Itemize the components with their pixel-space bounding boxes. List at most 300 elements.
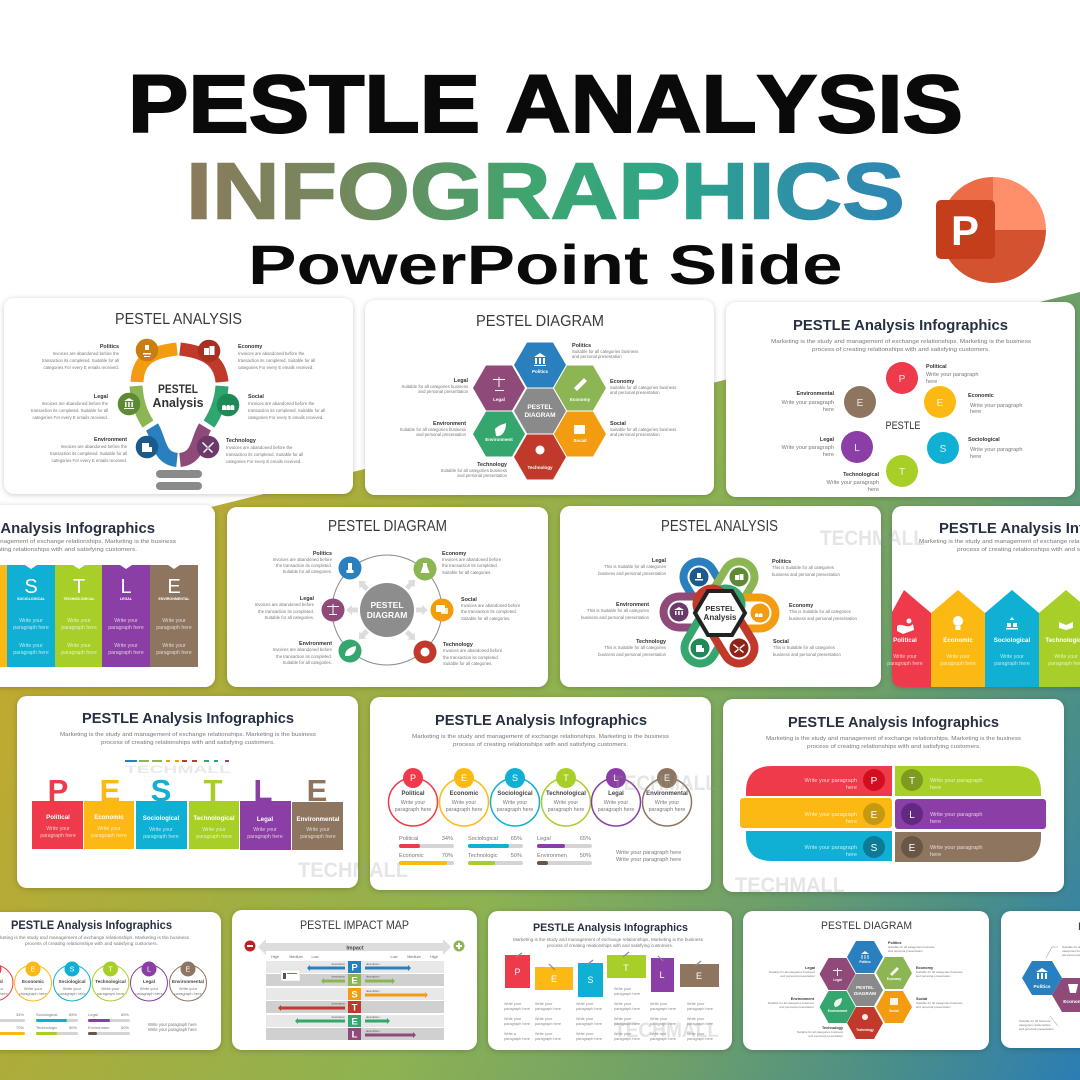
note paragraphs: Write your <box>576 1032 594 1036</box>
letter circles <box>841 362 959 487</box>
label: Economy: categories For every E emails received. <box>238 365 313 370</box>
panel: PESTLE letter blocks slide <box>17 696 358 888</box>
arrow columns: paragraph here <box>940 661 976 667</box>
note paragraphs: Write your <box>504 1002 522 1006</box>
impact grid: S <box>351 990 358 1000</box>
label: Economy: Economy <box>238 344 262 350</box>
sticky notes: P <box>514 967 521 977</box>
ring items: Write your <box>140 986 159 991</box>
arrow columns: Political <box>893 637 917 644</box>
connector notes <box>1019 945 1080 1031</box>
label: Environment <box>768 997 815 1009</box>
slide heading: PESTEL ANALYSIS <box>661 518 778 535</box>
arrow columns: paragraph here <box>887 661 923 667</box>
column chart panels: E <box>167 576 181 598</box>
label: Technological <box>827 472 879 493</box>
impact grid <box>266 961 444 1040</box>
column chart panels: S <box>24 576 38 598</box>
impact arrows: description <box>331 1002 345 1006</box>
note paragraphs: paragraph here <box>504 1022 530 1026</box>
impact scale labels: Medium <box>289 955 303 959</box>
progress bars: Sociological <box>36 1012 57 1017</box>
slide heading: PESTLE Analysis Infographics <box>788 714 999 731</box>
column chart panels: paragraph here <box>156 625 192 631</box>
hexagon cluster: Politics <box>532 369 548 374</box>
connector notes: Suitable for all business <box>1019 1019 1051 1023</box>
label: Environment: categories For every E emails received. <box>52 458 127 463</box>
letter blocks: T <box>204 773 223 808</box>
hexagon cluster: Technology <box>856 1028 874 1032</box>
ring items: S <box>512 773 518 783</box>
panel: PESTEL impact map slide <box>232 910 477 1050</box>
letter blocks: Write your <box>46 826 70 832</box>
paragraph note: Write your paragraph here <box>148 1022 197 1027</box>
label: Legal: Legal <box>805 966 815 970</box>
hexagon cluster: Politics <box>859 960 871 964</box>
watermark: TECHMALL middle: TECHMALL <box>612 772 717 795</box>
label: Economy <box>916 966 963 978</box>
label: Technology <box>443 642 503 666</box>
note paragraphs: Write your <box>650 1002 668 1006</box>
slide subtitle <box>412 734 669 748</box>
impact scale labels: Low <box>312 955 319 959</box>
ring items: Environmental <box>646 791 688 797</box>
ring items: L <box>147 966 151 974</box>
column chart panels: Write your <box>114 618 138 624</box>
label: Environment <box>273 641 333 665</box>
note paragraphs: paragraph here <box>535 1022 561 1026</box>
watermark: TECHMALL left: TECHMALL <box>298 859 408 882</box>
impact arrows: description <box>331 1015 345 1019</box>
slide heading: PESTEL IMPACT MAP <box>300 918 409 932</box>
arrow columns: paragraph here <box>994 661 1030 667</box>
ring items: paragraph here <box>446 807 482 813</box>
note paragraphs: paragraph here <box>687 1022 713 1026</box>
label: Economic: Economic <box>968 393 994 399</box>
split bars: here <box>846 852 857 858</box>
panel: circular PESTEL diagram slide <box>227 507 548 687</box>
ring items: Technological <box>95 979 126 984</box>
label: Legal: Legal <box>820 437 834 443</box>
label: Economy: Economy <box>442 551 466 557</box>
split bars: here <box>846 785 857 791</box>
label: Politics: and personal presentation <box>888 949 923 953</box>
label: Politics: the transaction its completed. <box>276 563 332 568</box>
note paragraphs: paragraph here <box>650 1007 676 1011</box>
impact arrows: description <box>366 974 380 978</box>
progress bars: Legal <box>88 1012 98 1017</box>
ring items <box>388 768 692 826</box>
hexagon cluster: Social <box>889 1009 899 1013</box>
note paragraphs: paragraph here <box>535 1007 561 1011</box>
impact grid: L <box>352 1030 358 1040</box>
slide heading: PESTLE Analysis Infographics <box>533 922 688 934</box>
label: Environmental: Environmental <box>797 391 834 397</box>
ring items: Write your <box>452 800 476 806</box>
ring items: P <box>410 773 416 783</box>
slide subtitle: process of creating relationships with and satisfying customers. <box>25 941 158 946</box>
progress bars: Environmen <box>537 853 567 859</box>
progress bars: 50% <box>580 853 591 859</box>
label: Environment: Invoices are abandoned before <box>273 647 333 652</box>
label: Politics: Invoices are abandoned before the <box>53 351 120 356</box>
arrow columns: Write your <box>946 654 970 660</box>
progress bars: Political <box>399 836 418 842</box>
progress bars: Environmen <box>88 1025 109 1030</box>
ring items: E <box>31 966 36 974</box>
label: Social <box>248 394 325 420</box>
label: Technology: Invoices are abandoned before <box>443 648 503 653</box>
column chart panels: paragraph here <box>61 625 97 631</box>
ring items: paragraph here <box>174 991 202 996</box>
hexagon cluster <box>820 941 912 1039</box>
label: Politics: Politics <box>572 343 591 349</box>
ring items: Write your <box>503 800 527 806</box>
letter circles: L <box>854 443 860 454</box>
title: INFOGRAPHICS: INFOGRAPHICS <box>186 147 905 236</box>
impact axis arrow: Impact <box>346 946 364 952</box>
label: Technology <box>598 639 667 657</box>
hexagon cluster: DIAGRAM <box>854 991 876 996</box>
column chart panels: paragraph here <box>156 650 192 656</box>
label: Technology: Technology <box>226 438 256 444</box>
split bars: Write your paragraph <box>930 778 982 784</box>
label: Technology: the transaction its completed. <box>443 655 499 660</box>
circular diagram: PESTEL <box>370 600 404 610</box>
label: Economy: Invoices are abandoned before <box>442 557 502 562</box>
progress bars: 34% <box>442 836 453 842</box>
slide subtitle: Marketing is the study and management of exchange relationships. Marketing is the business <box>60 732 316 738</box>
label: Economic: Write your paragraph <box>970 403 1022 409</box>
label: Legal: transaction its completed. Suitable for all <box>31 408 108 413</box>
label: Technology: Invoices are abandoned before the <box>226 445 293 450</box>
label: Social: categories For every E emails received. <box>248 415 323 420</box>
slide subtitle: Marketing is the study and management of exchange relationships. Marketing is the business <box>771 339 1031 345</box>
label: Politics <box>42 344 120 370</box>
ring items: Write your <box>101 986 120 991</box>
label: Economy: and personal presentation <box>916 974 951 978</box>
progress bars: 50% <box>511 853 522 859</box>
label: Legal: Write your paragraph <box>782 445 834 451</box>
split bars: Write your paragraph <box>930 812 982 818</box>
hexagon cluster: Technology <box>528 465 553 470</box>
slide subtitle: process of creating relationships with and satisfying customers. <box>547 943 673 948</box>
slide subtitle <box>919 539 1080 553</box>
label: Economic: here <box>970 409 981 415</box>
ring items: E <box>186 966 191 974</box>
ring items: E <box>664 773 670 783</box>
ring items: Technological <box>546 791 586 797</box>
split bars: E <box>871 810 878 821</box>
note paragraphs: paragraph here <box>650 1037 676 1041</box>
split bars: Write your paragraph <box>805 778 857 784</box>
slide heading: PESTEL DIAGRAM <box>821 920 912 932</box>
column chart panels: SOCIOLOGICAL <box>17 597 46 601</box>
label: Political: here <box>926 379 937 385</box>
label: Social: Social <box>916 997 927 1001</box>
panel: arrow columns slide (cropped right) <box>887 506 1080 687</box>
impact scale labels: Medium <box>407 955 421 959</box>
note paragraphs: paragraph here <box>650 1022 676 1026</box>
slide subtitle <box>0 539 176 553</box>
label: Economy: Suitable for all categories business <box>916 970 963 974</box>
column chart panels: paragraph here <box>13 625 49 631</box>
column chart panels: LEGAL <box>120 597 133 601</box>
hexagon cluster: PESTEL <box>527 404 553 411</box>
note paragraphs: paragraph here <box>687 1037 713 1041</box>
label: Politics: transaction its completed. Suitable for all <box>42 358 119 363</box>
impact scale labels: Low <box>391 955 398 959</box>
impact scale labels: High <box>271 955 279 959</box>
note paragraphs: Write your <box>687 1032 705 1036</box>
label: Legal <box>31 394 109 420</box>
impact axis arrow <box>244 939 464 955</box>
letter circles: E <box>937 398 944 409</box>
letter blocks: paragraph here <box>300 834 336 840</box>
ring items: Write your <box>401 800 425 806</box>
label: Politics: Politics <box>100 344 119 350</box>
label: Sociological <box>968 437 1022 460</box>
label: Social <box>610 421 676 437</box>
impact grid: E <box>351 976 358 986</box>
label: Technology: Technology <box>822 1026 844 1030</box>
split bars: here <box>930 852 941 858</box>
ring items: Economic <box>22 979 44 984</box>
column chart panels: Write your <box>67 618 91 624</box>
label: Political: Political <box>926 364 947 370</box>
paragraph note: Write your paragraph here <box>616 850 681 856</box>
split bars: Write your paragraph <box>930 845 982 851</box>
split bars: E <box>909 843 916 854</box>
icon: PowerPoint logo: P <box>951 207 979 254</box>
hexagon cluster: Environment <box>485 437 513 442</box>
arrow columns: Write your <box>1054 654 1078 660</box>
ring items: Economic <box>450 791 479 797</box>
label: Social: Social <box>773 639 789 645</box>
label: Politics: and personal presentation <box>572 354 622 359</box>
note paragraphs: Write your <box>614 987 632 991</box>
label: Social: and personal presentation <box>916 1005 951 1009</box>
column chart panels: TECHNOLOGICAL <box>63 597 95 601</box>
progress bars: 65% <box>511 836 522 842</box>
letter blocks: S <box>151 773 171 808</box>
note paragraphs: Write your <box>576 1017 594 1021</box>
label: Legal <box>255 596 315 620</box>
column chart panels: ENVIRONMENTAL <box>158 597 190 601</box>
label: Environment: Suitable for all categories business <box>400 427 466 432</box>
letter blocks: Technological <box>193 815 235 822</box>
title: PowerPoint Slide: PowerPoint Slide <box>248 233 843 296</box>
column chart panels: Write your <box>162 643 186 649</box>
label: Politics: Politics <box>313 551 332 557</box>
label: Legal <box>782 437 834 458</box>
flower diagram: Analysis <box>704 613 737 622</box>
column chart panels: Write your <box>114 643 138 649</box>
ring items: L <box>613 773 619 783</box>
split bars: T <box>909 776 915 787</box>
ring items: Environmental <box>172 979 204 984</box>
label: Political <box>926 364 978 385</box>
label: Legal: Invoices are abandoned before <box>255 602 315 607</box>
letter blocks: L <box>254 773 272 808</box>
progress bars: 65% <box>121 1012 129 1017</box>
impact scale labels: High <box>430 955 438 959</box>
progress bars <box>0 1012 130 1035</box>
slide subtitle <box>60 732 316 746</box>
panel: rings and progress bars slide <box>370 697 711 890</box>
hexagon cluster: Economy <box>887 977 901 981</box>
split bars <box>740 766 1046 862</box>
slide heading: PESTEL ANALYSIS <box>115 311 242 328</box>
letter blocks: E <box>100 773 120 808</box>
ring items: paragraph here <box>19 991 47 996</box>
letter circles: P <box>899 374 906 385</box>
slide subtitle: process of creating relationships with and satisfying customers. <box>812 347 991 353</box>
impact grid: P <box>351 962 358 974</box>
label: Environment <box>50 437 128 463</box>
progress bars: 65% <box>69 1012 77 1017</box>
label: Social: Suitable for all categories. <box>461 616 510 621</box>
column chart panels: Write your <box>19 643 43 649</box>
progress bars: 50% <box>69 1025 77 1030</box>
watermark: TECHMALL top: TECHMALL <box>820 527 925 550</box>
arrow columns: Write your <box>893 654 917 660</box>
label: Environment: Environment <box>616 602 649 608</box>
white header area <box>0 0 1080 559</box>
label: Legal: Suitable for all categories business <box>769 970 816 974</box>
ring items: paragraph here <box>548 807 584 813</box>
slide subtitle: process of creating relationships with and satisfying customers. <box>807 744 981 750</box>
impact scale labels <box>271 955 438 959</box>
letter blocks: Economic <box>94 814 124 821</box>
label: Legal: Invoices are abandoned before the <box>42 401 109 406</box>
label: Environmental <box>782 391 834 413</box>
note paragraphs: paragraph here <box>535 1037 561 1041</box>
hexagon cluster: Economy <box>570 397 591 402</box>
label: Technology: and personal presentation <box>808 1034 843 1038</box>
panel: hexagon PESTEL diagram slide <box>365 300 714 495</box>
impact arrows: description <box>366 1029 380 1033</box>
label: Legal <box>598 558 667 576</box>
label: Social: transaction its completed. Suitable for all <box>248 408 325 413</box>
label: Legal <box>402 378 469 394</box>
label: Legal: Suitable for all categories business <box>402 384 468 389</box>
progress bars: 70% <box>16 1025 24 1030</box>
column chart panels: Write your <box>67 643 91 649</box>
letter blocks: paragraph here <box>196 834 232 840</box>
ring items: paragraph here <box>395 807 431 813</box>
label: Social <box>461 597 521 621</box>
note paragraphs: Write your <box>504 1017 522 1021</box>
ring items: Legal <box>608 791 624 797</box>
label: Economy <box>442 551 502 575</box>
label: Technology: Suitable for all categories business <box>441 468 507 473</box>
label: Social <box>773 639 841 657</box>
label: Environment: business and personal presentation <box>581 615 650 620</box>
ring items: S <box>70 966 75 974</box>
hexagons <box>1022 947 1080 1026</box>
label: Economy: Economy <box>916 966 934 970</box>
column chart panels: Write your <box>19 618 43 624</box>
label: Politics <box>888 941 935 953</box>
label: Economy: business and personal presentation <box>789 616 857 621</box>
slide subtitle <box>766 736 1021 750</box>
label: Technology: transaction its completed. Suitable for all <box>226 452 303 457</box>
label: Politics: This is Suitable for all categories <box>772 565 834 570</box>
label: Social: This is Suitable for all categories <box>773 645 835 650</box>
label: Legal: categories For every E emails received. <box>33 415 108 420</box>
note paragraphs: Write your <box>650 1017 668 1021</box>
label: Sociological: Write your paragraph <box>970 447 1022 453</box>
paragraph note <box>148 1022 197 1032</box>
impact arrows <box>278 962 428 1038</box>
label: Legal: here <box>823 452 834 458</box>
note paragraphs: paragraph here <box>614 992 640 996</box>
label: Social: Invoices are abandoned before the <box>248 401 315 406</box>
slide heading: PESTEL DIAGRAM <box>328 518 447 535</box>
letter blocks: paragraph here <box>91 833 127 839</box>
paragraph note <box>616 850 681 863</box>
sticky notes <box>505 952 719 997</box>
sticky notes: L <box>659 970 665 980</box>
impact grid: E <box>351 1016 358 1028</box>
impact arrows: description <box>366 1015 380 1019</box>
panel: split rounded bars slide <box>723 699 1064 892</box>
progress bars: Sociological <box>468 836 498 842</box>
label: Technological: here <box>868 487 879 493</box>
column chart panels: paragraph here <box>108 625 144 631</box>
note paragraphs: Write a <box>504 1032 517 1036</box>
panel: lightbulb PESTEL analysis slide <box>4 298 353 494</box>
letter blocks: paragraph here <box>247 834 283 840</box>
label: Economy <box>610 379 676 395</box>
column chart panels: paragraph here <box>108 650 144 656</box>
flower diagram: PESTEL <box>705 604 735 613</box>
label: Legal <box>769 966 816 978</box>
label: Economic <box>968 393 1022 415</box>
label: Environment: Invoices are abandoned before the <box>61 444 128 449</box>
note paragraphs: paragraph here <box>576 1022 602 1026</box>
label: Social: the transaction its completed. <box>461 609 517 614</box>
slide heading: PESTLE Analysis Infographics <box>793 317 1008 334</box>
lightbulb diagram: Analysis <box>152 396 204 410</box>
label: Politics <box>572 343 638 359</box>
letter blocks: Write your <box>202 827 226 833</box>
lightbulb diagram: PESTEL <box>158 382 198 396</box>
label: Technology: business and personal presentation <box>598 652 667 657</box>
label: Social: Social <box>461 597 477 603</box>
letter blocks: E <box>307 773 327 808</box>
label: Technology: Technology <box>636 639 666 645</box>
label: Sociological: here <box>970 454 981 460</box>
ring items: T <box>563 773 569 783</box>
connector notes: categories relationships <box>1019 1023 1051 1027</box>
column chart panels: paragraph here <box>13 650 49 656</box>
label: Social: business and personal presentation <box>773 652 841 657</box>
label: Politics: Politics <box>888 941 902 945</box>
label: Political: Write your paragraph <box>926 372 978 378</box>
letter blocks: Political <box>46 814 70 821</box>
note paragraphs: Write your <box>535 1032 553 1036</box>
label: Economy: This is Suitable for all categories <box>789 609 851 614</box>
label: Environment: Environment <box>433 421 466 427</box>
progress bars: Technologic <box>36 1025 57 1030</box>
slide subtitle: process of creating relationships with and satisfying customers. <box>453 742 628 748</box>
letter circles: E <box>857 398 864 409</box>
label: Politics: Invoices are abandoned before <box>273 557 333 562</box>
letter blocks: Write your <box>149 827 173 833</box>
label: Technology <box>797 1026 844 1038</box>
